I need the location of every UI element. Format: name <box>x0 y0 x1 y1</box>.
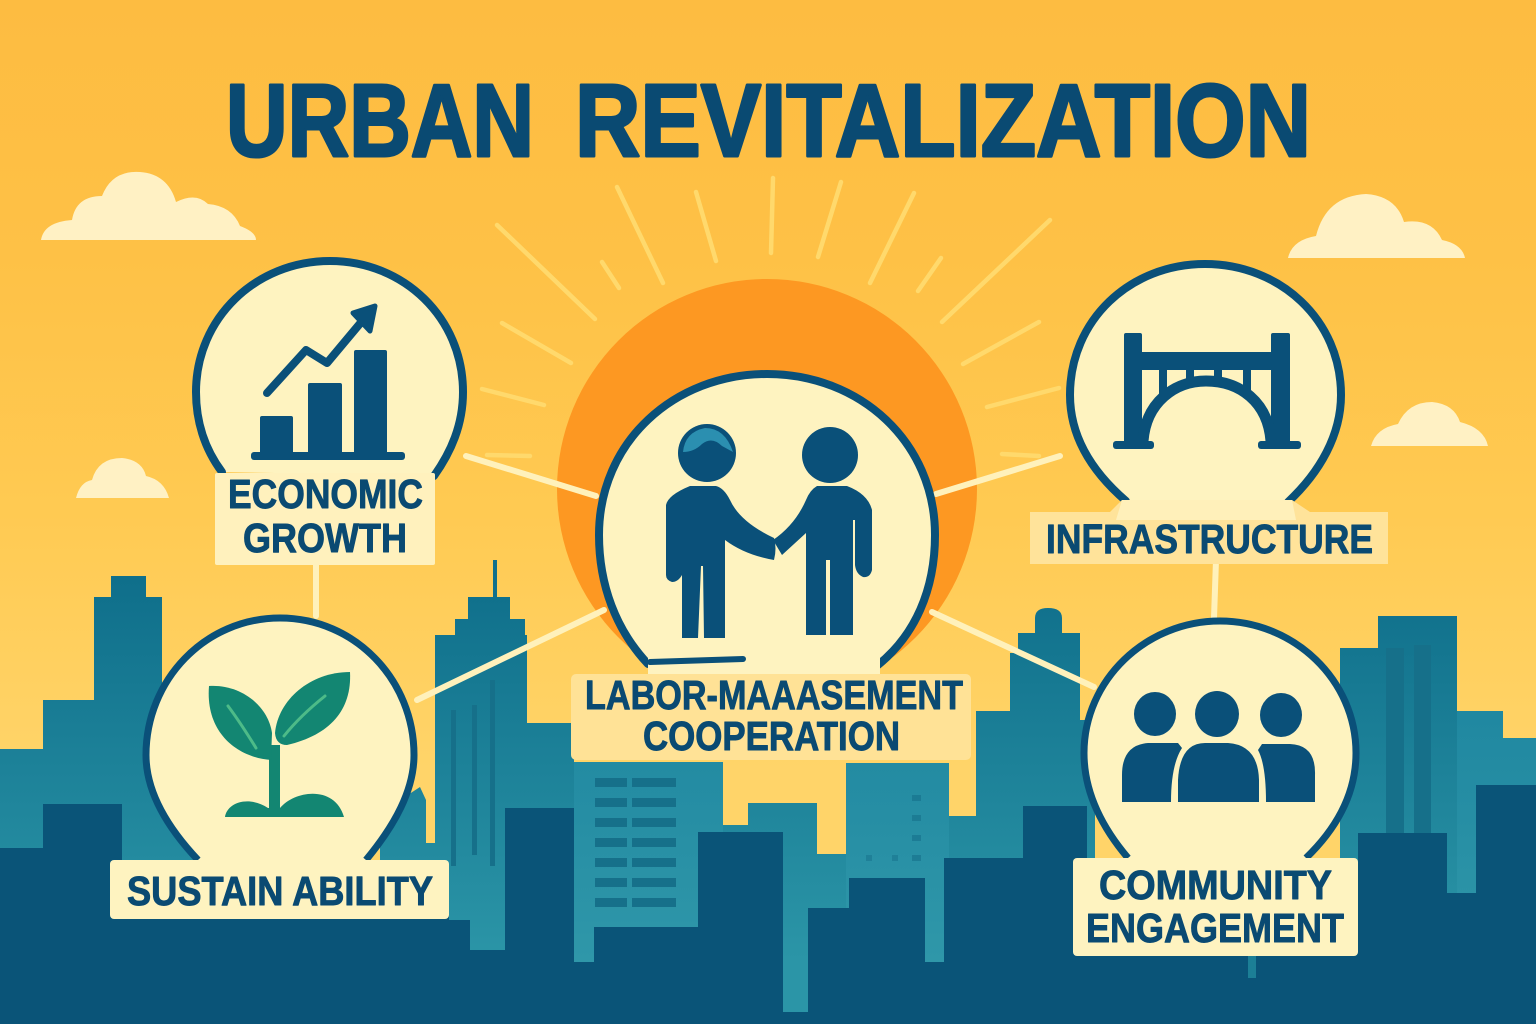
connector lines <box>316 456 1216 700</box>
panel: sustainability <box>110 618 449 919</box>
cloud: middle left <box>76 458 169 498</box>
panel: labor-management cooperation <box>571 374 971 760</box>
circle <box>1084 621 1356 858</box>
label text: COMMUNITY <box>1099 862 1332 908</box>
circle <box>1070 264 1341 502</box>
label text <box>1086 862 1344 951</box>
title <box>226 63 1311 178</box>
icon: bar chart with arrow <box>251 306 405 460</box>
label box <box>571 674 971 760</box>
icon: handshake people <box>666 424 872 638</box>
label text: LABOR-MAAASEMENT <box>585 672 963 718</box>
label text: ECONOMIC <box>228 471 423 517</box>
label text: ENGAGEMENT <box>1086 905 1344 951</box>
panel: infrastructure <box>1030 264 1388 564</box>
skyline: front towers <box>0 785 1536 1024</box>
cloud: upper right <box>1288 194 1465 258</box>
sun rays <box>482 178 1059 456</box>
label text: SUSTAIN ABILITY <box>127 868 433 914</box>
label text: COOPERATION <box>643 713 900 759</box>
title: URBAN <box>226 63 534 178</box>
label text <box>228 471 423 561</box>
panel: economic growth <box>196 261 463 565</box>
label box <box>215 473 435 565</box>
icon: sprout <box>209 672 350 817</box>
cream fade under circle <box>1116 500 1296 520</box>
icon: bridge <box>1113 333 1301 449</box>
label text: INFRASTRUCTURE <box>1046 516 1373 562</box>
circle <box>196 261 463 476</box>
label text: GROWTH <box>243 515 407 561</box>
cream fill beneath circle <box>648 655 880 677</box>
title: REVITALIZATION <box>575 63 1311 178</box>
skyline: small teal strip <box>1248 950 1256 978</box>
panel: community engagement <box>1073 621 1358 956</box>
sun <box>557 279 977 699</box>
circle: center <box>599 374 935 665</box>
skyline: lighter central and right buildings <box>574 711 1536 1024</box>
label box <box>1073 858 1358 956</box>
circle <box>146 618 414 860</box>
underline stroke <box>650 659 743 662</box>
label box <box>1030 500 1388 564</box>
label box <box>110 860 449 919</box>
cloud: middle right <box>1371 402 1488 446</box>
skyline: window grids and stripes <box>451 645 1431 907</box>
label text <box>585 672 963 759</box>
cloud: upper left <box>41 172 256 240</box>
icon: three people <box>1122 691 1315 802</box>
skyline: back towers <box>0 560 1476 1024</box>
